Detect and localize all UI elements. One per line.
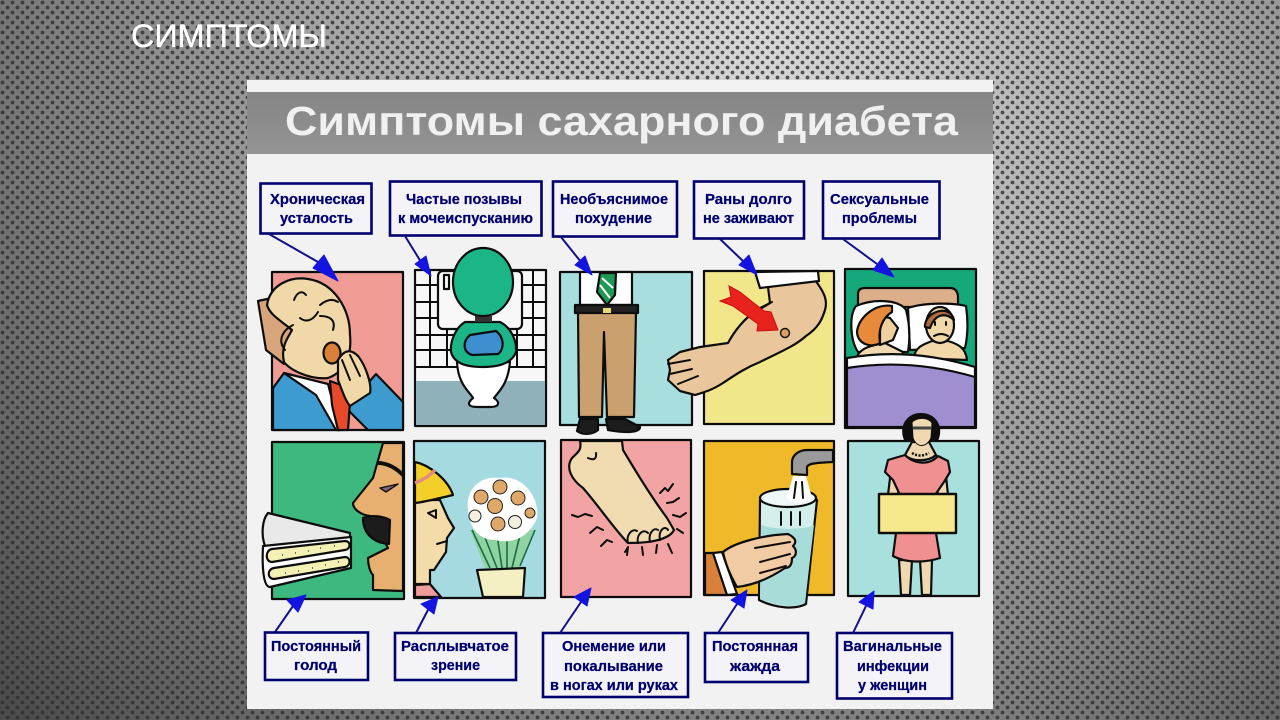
red tie [330,381,350,430]
poster heading band: Симптомы сахарного диабета [285,98,959,144]
foot [569,441,674,543]
white shirt [580,272,632,305]
panel: chronic fatigue [258,272,403,430]
panel: numbness or tingling [561,440,691,597]
hand holding glass [723,534,796,587]
pink dress [885,455,950,562]
eyebrow [379,463,403,475]
raised lid [453,248,513,316]
drinking glass [759,489,817,607]
label: numbness: в ногах или руках [550,678,678,694]
woman in bed [856,306,903,360]
girl's face [415,500,454,584]
blue bowl water [465,331,503,355]
green seat [451,322,516,367]
man's face [353,443,403,591]
label: numbness [543,633,688,697]
white sheet [847,354,975,380]
label: frequent urination: к мочеиспусканию [398,211,533,227]
label: infections: у женщин [858,678,927,694]
open mouth [363,516,390,544]
poster: symptoms of diabetes [247,80,993,709]
label: infections: Вагинальные [843,639,942,655]
label: frequent urination [390,182,542,236]
panel: unexplained weight loss [560,272,692,434]
wound [780,328,790,338]
arrow: blurred vision [416,597,438,633]
tan trousers [578,312,636,417]
belt [575,305,638,313]
red pointer arrow [720,286,778,331]
label: numbness: Онемение или [562,639,666,655]
man's yawning head [267,278,350,378]
panel: blurred vision [414,441,545,598]
eye [380,484,398,492]
label: sexual problems: Сексуальные [830,192,929,208]
neck [905,442,936,460]
label: thirst: Постоянная [712,639,798,655]
label: infections: инфекции [857,659,929,675]
label: chronic fatigue [260,184,372,234]
blurry flower bouquet [468,478,537,541]
water stream [787,476,812,502]
label: sexual problems [823,182,940,238]
label: wounds [694,182,804,238]
label: blurred vision [395,633,516,680]
shoes [577,419,640,434]
label: hunger: голод [294,658,337,674]
arrow: weight loss [561,237,592,275]
headband [415,470,435,483]
girl's yellow hair [415,462,453,503]
arm with hand [668,280,826,395]
label: chronic fatigue: Хроническая [270,192,365,208]
black hair [902,413,940,441]
label: weight loss: Необъяснимое [560,192,668,208]
pillows [851,301,967,352]
illustrated panels [258,248,979,607]
poster heading band [247,92,993,154]
label: chronic fatigue: усталость [280,211,353,227]
label: hunger: Постоянный [271,639,361,655]
girl's dress [415,584,441,597]
label: infections [837,633,952,698]
arrow: urination [405,236,431,276]
face [912,418,932,446]
hand at mouth [338,351,370,406]
man's ear and back of head [258,298,293,364]
label: thirst [705,633,808,682]
sleeve [705,553,727,595]
striped tie [597,273,616,305]
toes [588,453,668,543]
panel: constant hunger [263,442,404,599]
hinge [475,316,492,322]
wall tiles [416,270,545,367]
white cuff [713,552,737,595]
label: weight loss: похудение [575,211,652,227]
label: frequent urination: Частые позывы [406,192,522,208]
blue suit [273,373,403,430]
tingling marks [572,484,686,555]
grey floor [416,381,545,425]
vase [477,568,525,597]
arrow: sexual problems [843,239,894,277]
white collar [284,373,340,430]
flower stems [470,530,535,568]
panel: constant thirst [704,441,834,607]
label: wounds: Раны долго [705,192,792,208]
panel: sexual problems [845,269,976,428]
woman's arms [888,476,948,495]
headboard [858,288,958,307]
slide title: СИМПТОМЫ [131,18,327,54]
cake slice [263,513,351,587]
label: blurred vision: Расплывчатое [401,639,509,655]
toilet bowl [457,362,510,407]
label: thirst: жажда [729,659,781,675]
necklace [912,453,929,456]
label: sexual problems: проблемы [842,211,917,227]
label: hunger [265,632,368,680]
arrow: wounds [720,239,757,275]
label: numbness: покалывание [564,659,663,675]
yellow modesty panel [879,494,956,533]
arrow: thirst [718,590,747,633]
shirt cuff [755,271,819,288]
woman's legs [899,560,932,595]
man in bed [914,307,967,360]
arrow: numbness [560,588,591,633]
purple blanket [847,365,975,427]
arrow: infections [853,591,874,633]
panel: frequent urination [415,248,546,426]
arrow: hunger [275,595,306,632]
arrow: fatigue [269,234,338,281]
label: wounds: не заживают [703,211,794,227]
label: blurred vision: зрение [431,658,480,674]
panel: slow healing wounds [668,271,834,424]
panel: vaginal infections [848,413,979,596]
flush button [444,275,449,289]
label: weight loss [553,182,677,236]
yawning mouth [324,342,340,364]
water tap [792,450,833,475]
cistern [438,271,522,329]
